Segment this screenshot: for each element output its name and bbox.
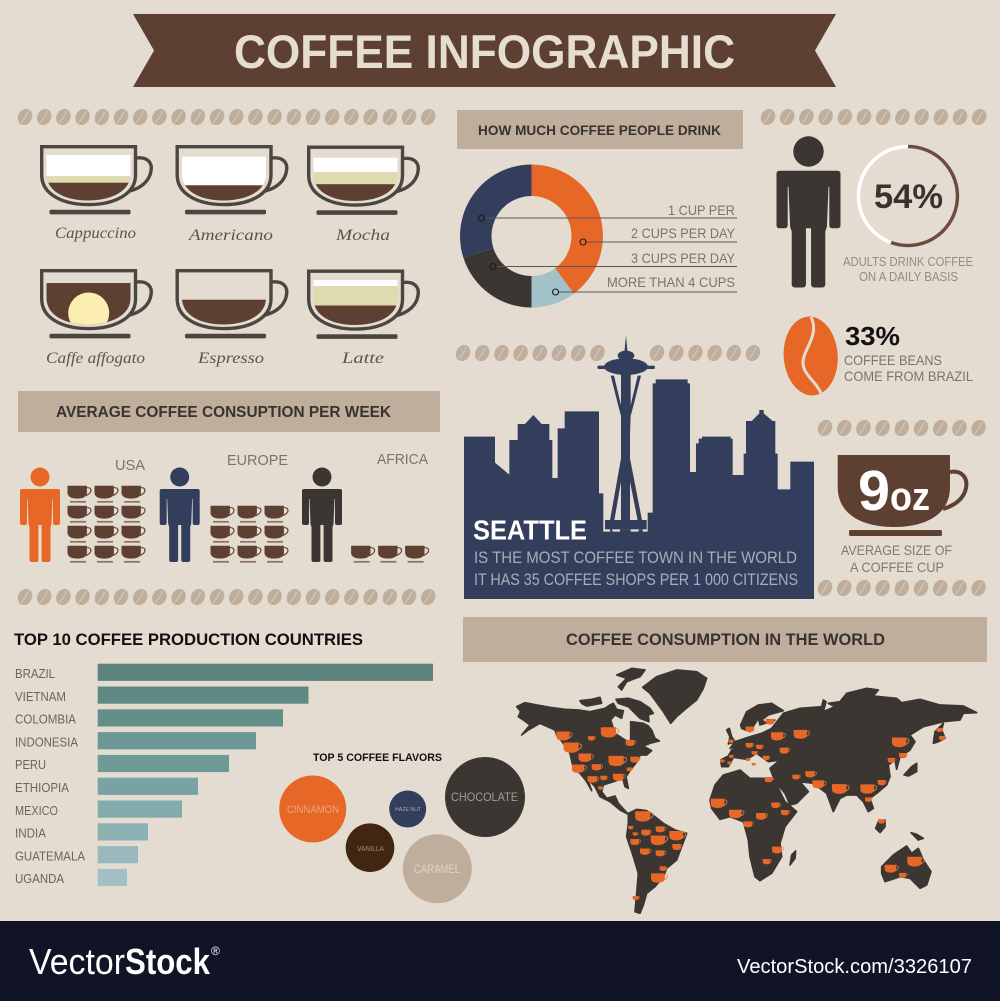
region: Europe: EUROPE — [227, 452, 288, 469]
donut chart — [460, 164, 737, 308]
bar chart: production countries: PERU — [15, 757, 46, 772]
footer bar: VectorStock.com/3326107 — [737, 956, 972, 978]
heading: how much coffee: HOW MUCH COFFEE PEOPLE DRINK — [478, 123, 721, 138]
footer bar: Vector — [29, 941, 125, 982]
heading: average consumption: AVERAGE COFFEE CONSUPTION PER WEEK — [56, 404, 391, 421]
stat: 54 percent — [776, 136, 973, 288]
panel: Seattle skyline: IS THE MOST COFFEE TOWN IN THE WORLD — [474, 549, 797, 567]
heading: world consumption — [463, 617, 987, 662]
bubble chart: flavors: HAZE NUT — [395, 807, 421, 813]
region: USA — [20, 457, 145, 563]
region: Europe — [160, 452, 288, 563]
cup: Cappuccino — [42, 147, 151, 242]
cup: Americano: Americano — [188, 227, 273, 244]
stat: 9oz cup: AVERAGE SIZE OF — [841, 542, 952, 558]
region: Africa: AFRICA — [377, 451, 428, 468]
bar chart: production countries: MEXICO — [15, 803, 58, 818]
donut chart: MORE THAN 4 CUPS — [607, 274, 735, 290]
stat: 9oz cup — [838, 455, 966, 575]
cup: Espresso — [177, 271, 287, 367]
footer bar — [0, 921, 1000, 1001]
heading: average consumption — [18, 391, 440, 432]
stat: 54 percent: ADULTS DRINK COFFEE — [843, 254, 973, 269]
cup: Latte: Latte — [341, 350, 384, 367]
stat: 33 percent: COFFEE BEANS — [844, 352, 942, 368]
panel: weekly consumption — [20, 451, 429, 563]
bar chart: production countries: COLOMBIA — [15, 712, 76, 727]
cup: Americano — [177, 147, 287, 244]
bar chart: production countries: BRAZIL — [15, 666, 55, 681]
cup: Latte — [309, 271, 418, 367]
stat: 9oz cup: 9 — [858, 459, 890, 523]
bubble chart: flavors: CARAMEL — [414, 864, 460, 876]
region: Africa — [302, 451, 429, 563]
stat: 33 percent: COME FROM BRAZIL — [844, 368, 973, 384]
bar chart: production countries — [15, 664, 433, 886]
panel: coffee types — [42, 147, 418, 367]
map: Americas — [517, 668, 707, 913]
cup: Mocha — [309, 147, 418, 244]
stat: 33 percent — [781, 315, 973, 397]
panel: Seattle skyline — [464, 335, 814, 599]
bubble chart: flavors — [279, 752, 525, 903]
panel: Seattle skyline: IT HAS 35 COFFEE SHOPS PER 1 000 CITIZENS — [474, 571, 798, 589]
cup: Mocha: Mocha — [335, 227, 390, 244]
bar chart: production countries: VIETNAM — [15, 689, 66, 704]
stat: 54 percent: ON A DAILY BASIS — [859, 269, 958, 284]
bubble chart: flavors: CHOCOLATE — [451, 790, 518, 804]
bar chart: production countries: UGANDA — [15, 871, 64, 886]
stat: 9oz cup: oz — [890, 475, 930, 519]
cup: Espresso: Espresso — [197, 350, 264, 367]
bar chart: production countries: ETHIOPIA — [15, 780, 69, 795]
map: Eurasia, Africa, Australia — [710, 688, 977, 888]
bubble chart: flavors: VANILLA — [357, 844, 384, 853]
bar chart: production countries: INDIA — [15, 826, 46, 841]
panel: Seattle skyline: SEATTLE — [473, 514, 587, 546]
footer bar: ® — [211, 944, 220, 958]
bar chart: production countries: GUATEMALA — [15, 848, 85, 863]
bubble chart: flavors: CINNAMON — [287, 804, 339, 816]
stat: 33 percent: 33% — [845, 321, 900, 351]
bubble chart: flavors: TOP 5 COFFEE FLAVORS — [313, 752, 442, 764]
stat: 54 percent: 54% — [874, 178, 943, 216]
stat: 9oz cup: A COFFEE CUP — [850, 559, 944, 575]
donut chart: 2 CUPS PER DAY — [631, 225, 736, 241]
region: USA: USA — [115, 457, 145, 474]
donut chart: 3 CUPS PER DAY — [631, 250, 736, 266]
bar chart: production countries: INDONESIA — [15, 734, 78, 749]
cup: Caffe affogato — [42, 271, 151, 367]
heading: top 10 countries: TOP 10 COFFEE PRODUCTION COUNTRIES — [14, 630, 363, 649]
donut chart: 1 CUP PER — [668, 202, 735, 218]
heading: how much coffee — [457, 110, 743, 149]
footer bar: Stock — [125, 941, 211, 982]
title banner: COFFEE INFOGRAPHIC — [234, 25, 735, 78]
cup: Cappuccino: Cappuccino — [55, 225, 136, 242]
heading: world consumption: COFFEE CONSUMPTION IN THE WORLD — [566, 630, 885, 649]
title banner — [133, 14, 836, 87]
world map — [517, 668, 977, 913]
cup: Caffe affogato: Caffe affogato — [46, 350, 145, 367]
space needle — [597, 335, 655, 532]
